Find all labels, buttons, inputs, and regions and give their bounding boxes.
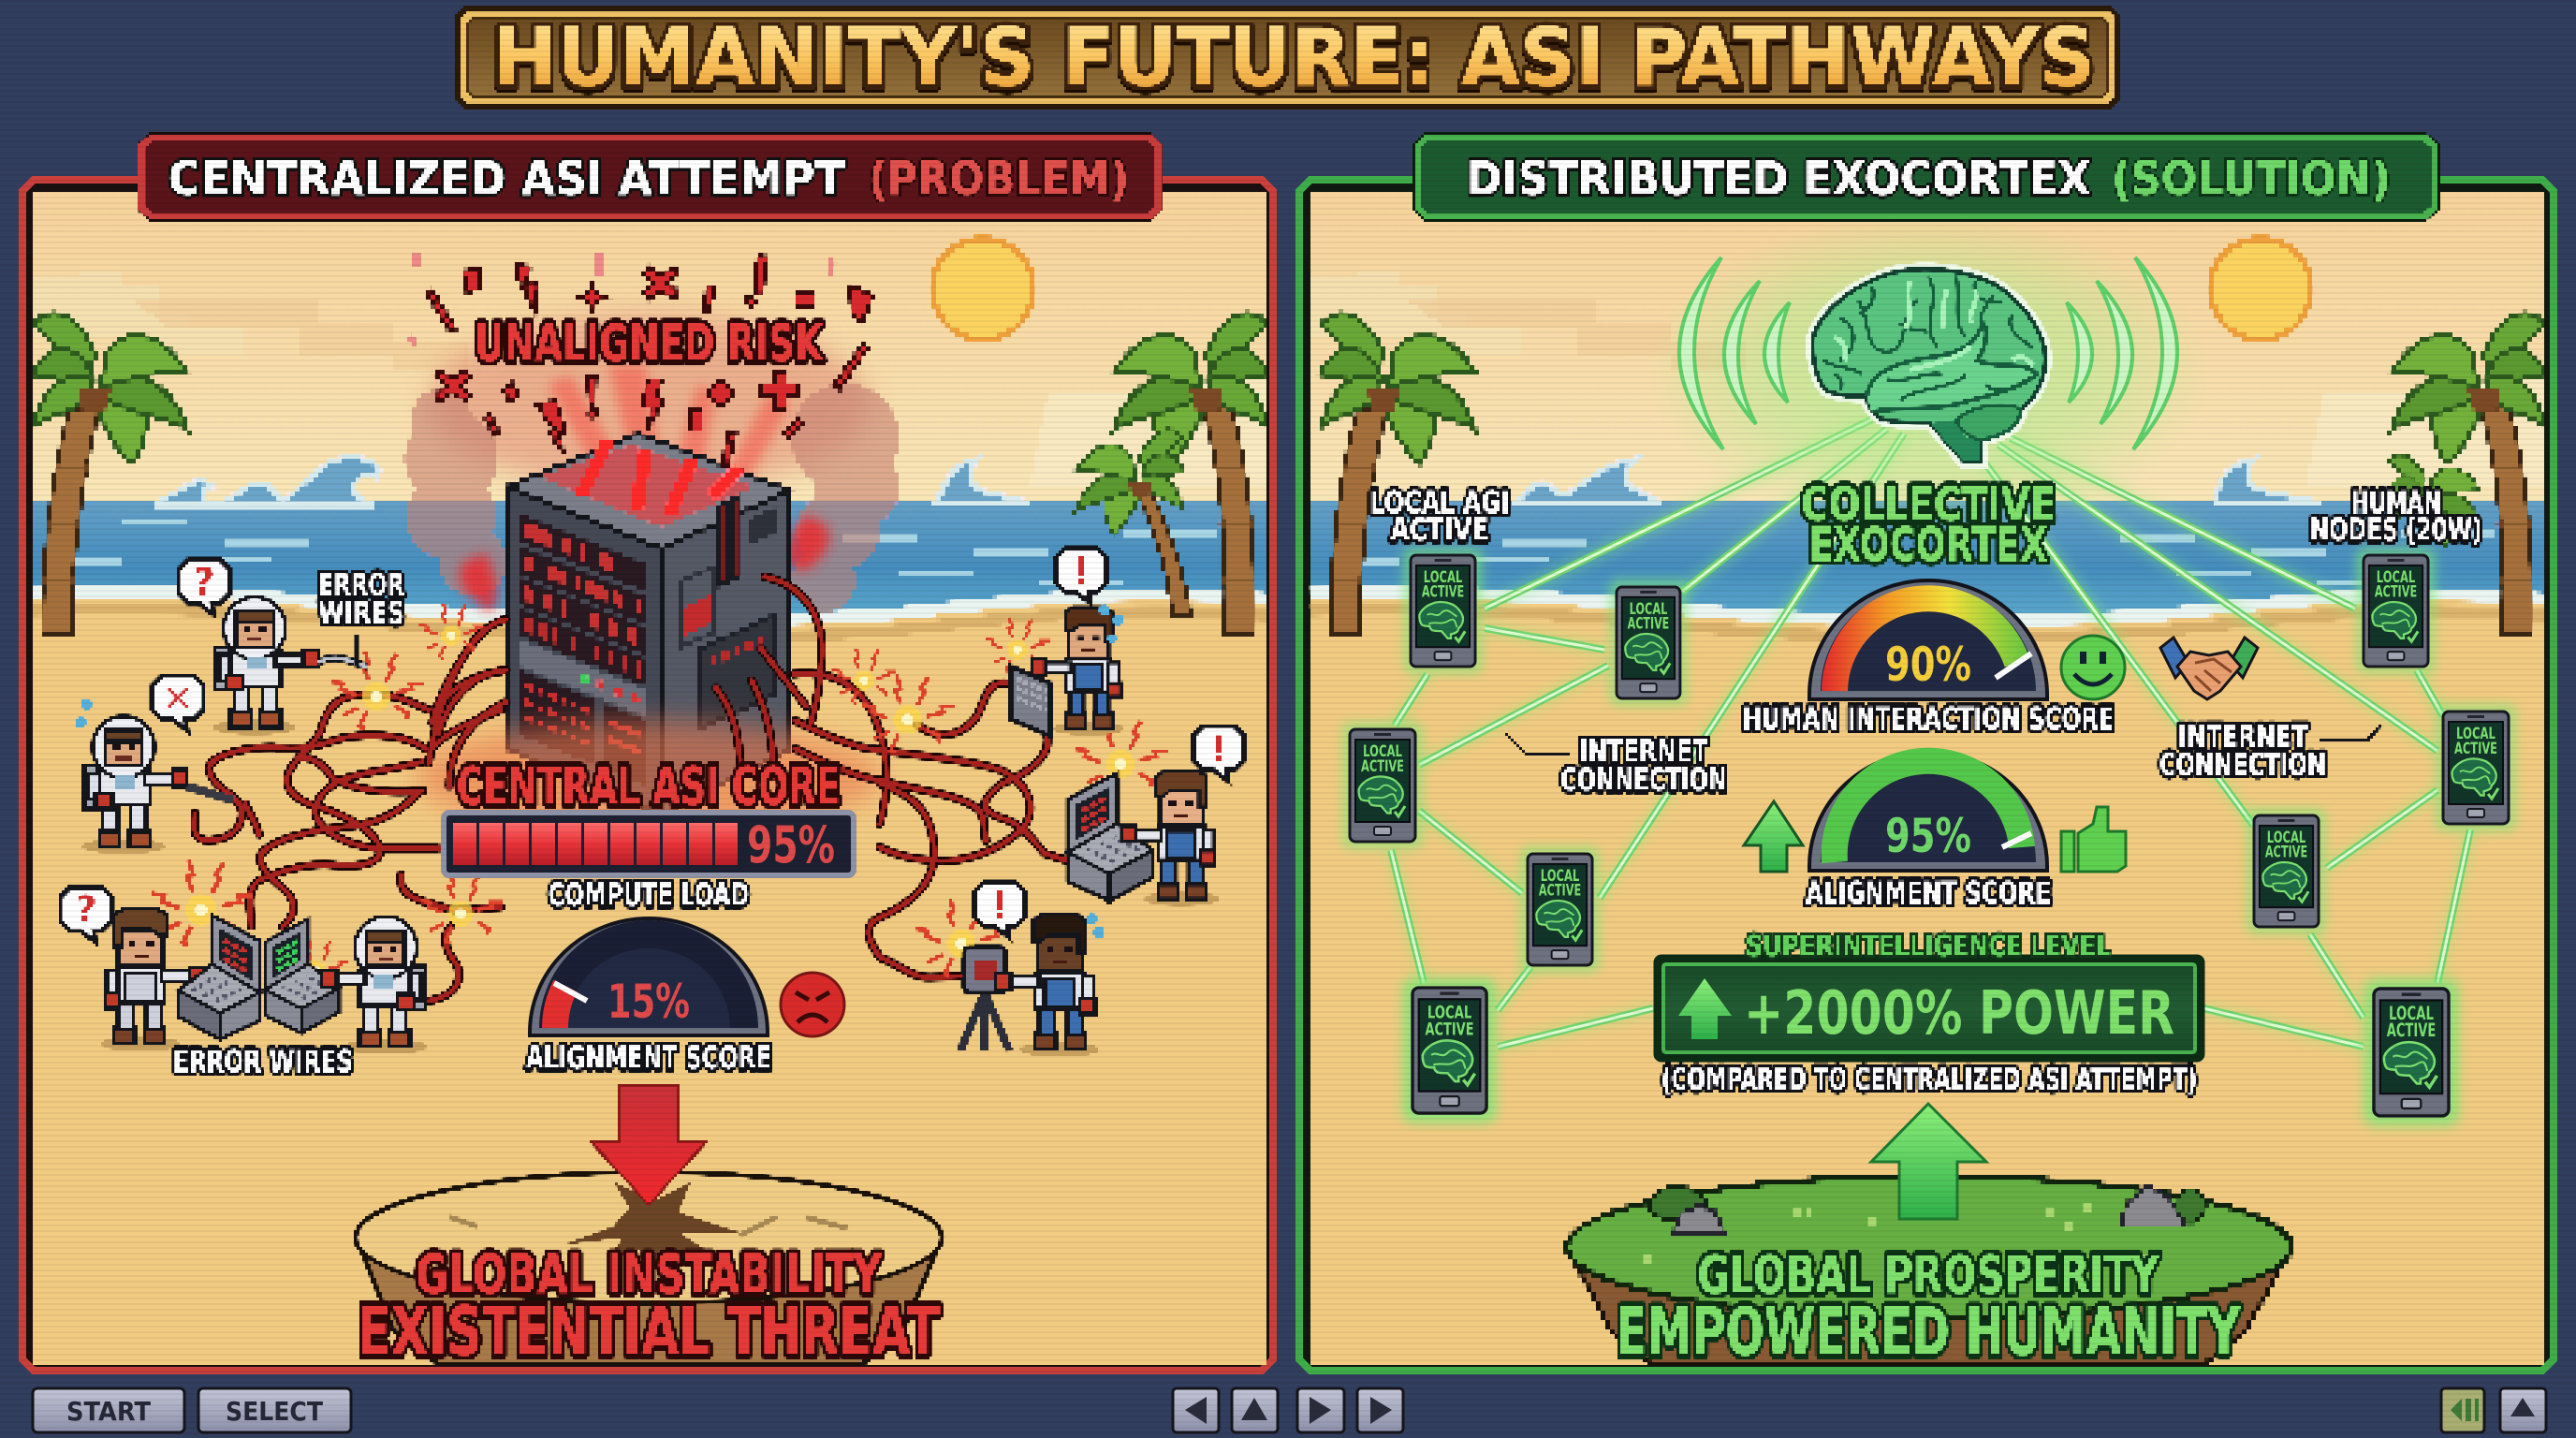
phone node 4 [1520, 846, 1600, 973]
gauge: alignment score 95 percent [1809, 752, 2047, 871]
label: error wires top: ERROR [318, 566, 404, 603]
panel: distributed exocortex [1299, 180, 2554, 1371]
label: local AGI active: ACTIVE [1391, 511, 1488, 548]
heading: global prosperity: GLOBAL PROSPERITY [1698, 1245, 2160, 1306]
phone node 3 [1342, 722, 1423, 849]
label: alignment score: ALIGNMENT SCORE [526, 1039, 771, 1076]
label: human nodes [2310, 484, 2482, 548]
phone node 5: LOCAL [1427, 1001, 1471, 1022]
speech bubble: alert top right [1056, 549, 1106, 603]
island: green prosperity [1567, 1176, 2291, 1365]
bush and rock right [2121, 1185, 2205, 1226]
header: distributed exocortex [1413, 133, 2439, 221]
speech bubble: question lower [61, 888, 111, 942]
phone node 5: ACTIVE [1426, 1018, 1474, 1039]
arrow: up to prosperity [1871, 1104, 1986, 1219]
label: error wires top [318, 566, 404, 667]
phone node 2: LOCAL [1630, 600, 1668, 618]
phone node 3: ACTIVE [1361, 757, 1404, 776]
label: error wires bottom: ERROR WIRES [173, 1043, 353, 1079]
red smoke cloud [404, 314, 900, 612]
progress bar: compute load: 95% [747, 815, 835, 874]
technician: astronaut lower [322, 917, 427, 1054]
palm tree right [2392, 314, 2547, 634]
sparks [152, 604, 1167, 993]
heading: collective exocortex: EXOCORTEX [1809, 518, 2047, 572]
text: power value: +2000% POWER [1744, 979, 2174, 1049]
palm tree left [32, 314, 187, 634]
button: play [1297, 1388, 1344, 1432]
phone node 6 [2356, 548, 2436, 674]
heading: collective exocortex: COLLECTIVE [1801, 477, 2056, 532]
red ground glow [415, 721, 883, 833]
label: internet connection left: CONNECTION [1560, 761, 1727, 798]
label: internet connection right [2159, 718, 2381, 783]
label: internet connection left [1505, 733, 1727, 798]
speech bubble: question: ? [193, 561, 215, 604]
title text: HUMANITY'S FUTURE: ASI PATHWAYS [492, 11, 2095, 105]
beach scene background [33, 192, 1273, 1367]
phone node 7 [2436, 704, 2516, 831]
speech bubble: alert middle right: ! [1210, 728, 1227, 771]
gauge: alignment score 15 percent: 15% [607, 975, 690, 1029]
button: next [1357, 1388, 1403, 1432]
speech bubble: alert lower right: ! [991, 885, 1008, 928]
phone node 2: ACTIVE [1628, 614, 1669, 633]
bush and rock left [1649, 1187, 1724, 1232]
error wires tangle [195, 577, 1067, 1004]
icon: smiling face [2061, 636, 2125, 699]
label: local AGI active: LOCAL AGI [1370, 484, 1509, 521]
technician: middle left [82, 716, 234, 854]
icon: sun [932, 239, 1033, 340]
label: internet connection right: INTERNET [2178, 718, 2307, 755]
header: distributed exocortex: (SOLUTION) [2112, 152, 2391, 206]
button: eject [2500, 1388, 2546, 1432]
icon: collective brain [1813, 269, 2045, 462]
button: start: START [66, 1396, 151, 1427]
console: right top [1011, 667, 1050, 736]
foreground illustration layer [61, 549, 1244, 1365]
palm tree small [2387, 455, 2481, 546]
label: superintelligence level: SUPERINTELLIGENCE LEVEL [1746, 930, 2111, 963]
brain glow [1647, 211, 2209, 538]
heading: global instability: GLOBAL INSTABILITY [416, 1242, 883, 1306]
phone node 1: LOCAL [1424, 567, 1462, 586]
header: distributed exocortex: DISTRIBUTED EXOCORTEX [1466, 152, 2091, 206]
power panel [1658, 959, 2201, 1058]
technician: worker middle right [1120, 770, 1219, 906]
consoles: twin terminals [179, 916, 339, 1039]
gauge: alignment score 95 percent: 95% [1885, 809, 1971, 863]
waves [157, 458, 1030, 506]
camera on tripod [960, 947, 1009, 1050]
icon: angry face [781, 973, 844, 1036]
text layer: right panel [1370, 477, 2482, 1371]
phone node 1 [1403, 548, 1483, 674]
beach scene background [1309, 192, 2549, 1367]
label: internet connection right: CONNECTION [2159, 746, 2326, 783]
unaligned risk symbols [408, 251, 873, 466]
phone node 9: ACTIVE [2387, 1020, 2436, 1041]
label: human nodes: NODES (20W) [2310, 511, 2482, 548]
label: human interaction score: HUMAN INTERACTION SCORE [1743, 700, 2114, 737]
header: centralized ASI attempt: (PROBLEM) [869, 152, 1129, 206]
label: compute load: COMPUTE LOAD [549, 876, 749, 913]
phone node 6: LOCAL [2377, 567, 2415, 586]
network connection lines [1391, 419, 2470, 1047]
button: green status [2441, 1388, 2484, 1432]
technician: lower left [101, 909, 204, 1051]
progress bar: compute load [444, 813, 854, 875]
technician: worker top right [1032, 608, 1124, 735]
phone node 4: LOCAL [1541, 866, 1579, 885]
speech bubble: question lower: ? [75, 888, 97, 932]
phone node 2 [1609, 580, 1688, 706]
phone node 8 [2247, 808, 2326, 934]
button: up arrow [1232, 1388, 1278, 1432]
label: comparison note: (COMPARED TO CENTRALIZED ASI ATTEMPT) [1661, 1061, 2197, 1097]
header: centralized ASI attempt: CENTRALIZED ASI ATTEMPT [168, 152, 844, 206]
icon: thumbs up [2061, 807, 2126, 872]
control bar [33, 1388, 2546, 1432]
grass tufts [1647, 1203, 2144, 1264]
phone node 5 [1403, 978, 1496, 1123]
heading: central ASI core: CENTRAL ASI CORE [457, 756, 841, 817]
label: human nodes: HUMAN [2351, 484, 2441, 521]
speech bubble: alert lower right [974, 883, 1025, 937]
brain signal waves [1679, 257, 2177, 449]
speech bubble: question [179, 560, 229, 614]
header: centralized ASI attempt [137, 133, 1163, 221]
red energy rays [548, 360, 791, 477]
speech bubble: error [153, 676, 203, 730]
gauge: alignment score 15 percent [530, 918, 768, 1035]
technician: top left [213, 597, 367, 735]
label: alignment score: ALIGNMENT SCORE [1806, 874, 2051, 911]
beach illustration layer [1309, 192, 2549, 1367]
phone node 4: ACTIVE [1539, 881, 1581, 900]
phone node 7: ACTIVE [2454, 740, 2497, 758]
speech bubble: alert middle right [1193, 726, 1244, 781]
technician: worker with headset [996, 915, 1099, 1057]
sweat drops [75, 605, 1124, 938]
phone node 3: LOCAL [1363, 742, 1402, 761]
palm tree left [1320, 314, 1475, 634]
title banner [456, 6, 2120, 109]
gauge: human interaction 90 percent: 90% [1885, 638, 1971, 692]
phone node 8: LOCAL [2267, 828, 2305, 846]
heading: unaligned risk: UNALIGNED RISK [475, 314, 825, 373]
label: local AGI active [1370, 484, 1509, 548]
icon: sun [2210, 239, 2311, 340]
phone node 9 [2364, 979, 2458, 1125]
phone node 1: ACTIVE [1422, 582, 1464, 601]
speech bubble: alert top right: ! [1073, 550, 1090, 594]
arrow: down to instability [592, 1086, 706, 1205]
button: start [33, 1388, 184, 1432]
speech bubble: error: ✕ [162, 678, 194, 721]
heading: collective exocortex [1801, 477, 2056, 572]
island: cracked desert [356, 1172, 942, 1365]
console: right middle [1068, 773, 1152, 901]
button: left arrow [1173, 1388, 1219, 1432]
label: internet connection left: INTERNET [1579, 733, 1708, 770]
server tower [507, 433, 790, 814]
phone node 6: ACTIVE [2375, 582, 2417, 601]
phone node 7: LOCAL [2456, 725, 2496, 743]
phone node 8: ACTIVE [2265, 843, 2307, 861]
palm tree small [1076, 430, 1191, 616]
label: error wires top: WIRES [318, 594, 404, 631]
waves [1516, 459, 2321, 503]
phone node 9: LOCAL [2389, 1003, 2434, 1024]
panel: centralized ASI attempt [22, 180, 1273, 1371]
palm tree right [1114, 314, 1269, 634]
button: select [198, 1388, 351, 1432]
arrow: power up [1678, 978, 1732, 1039]
heading: existential threat: EXISTENTIAL THREAT [358, 1292, 940, 1371]
heading: empowered humanity: EMPOWERED HUMANITY [1616, 1294, 2241, 1371]
button: select: SELECT [226, 1396, 323, 1427]
gauge: human interaction 90 percent [1809, 580, 2047, 699]
beach illustration layer [32, 192, 1273, 1367]
icon: handshake [2160, 638, 2258, 699]
arrow: up beside gauge [1744, 801, 1803, 872]
text layer: left panel [173, 314, 940, 1371]
